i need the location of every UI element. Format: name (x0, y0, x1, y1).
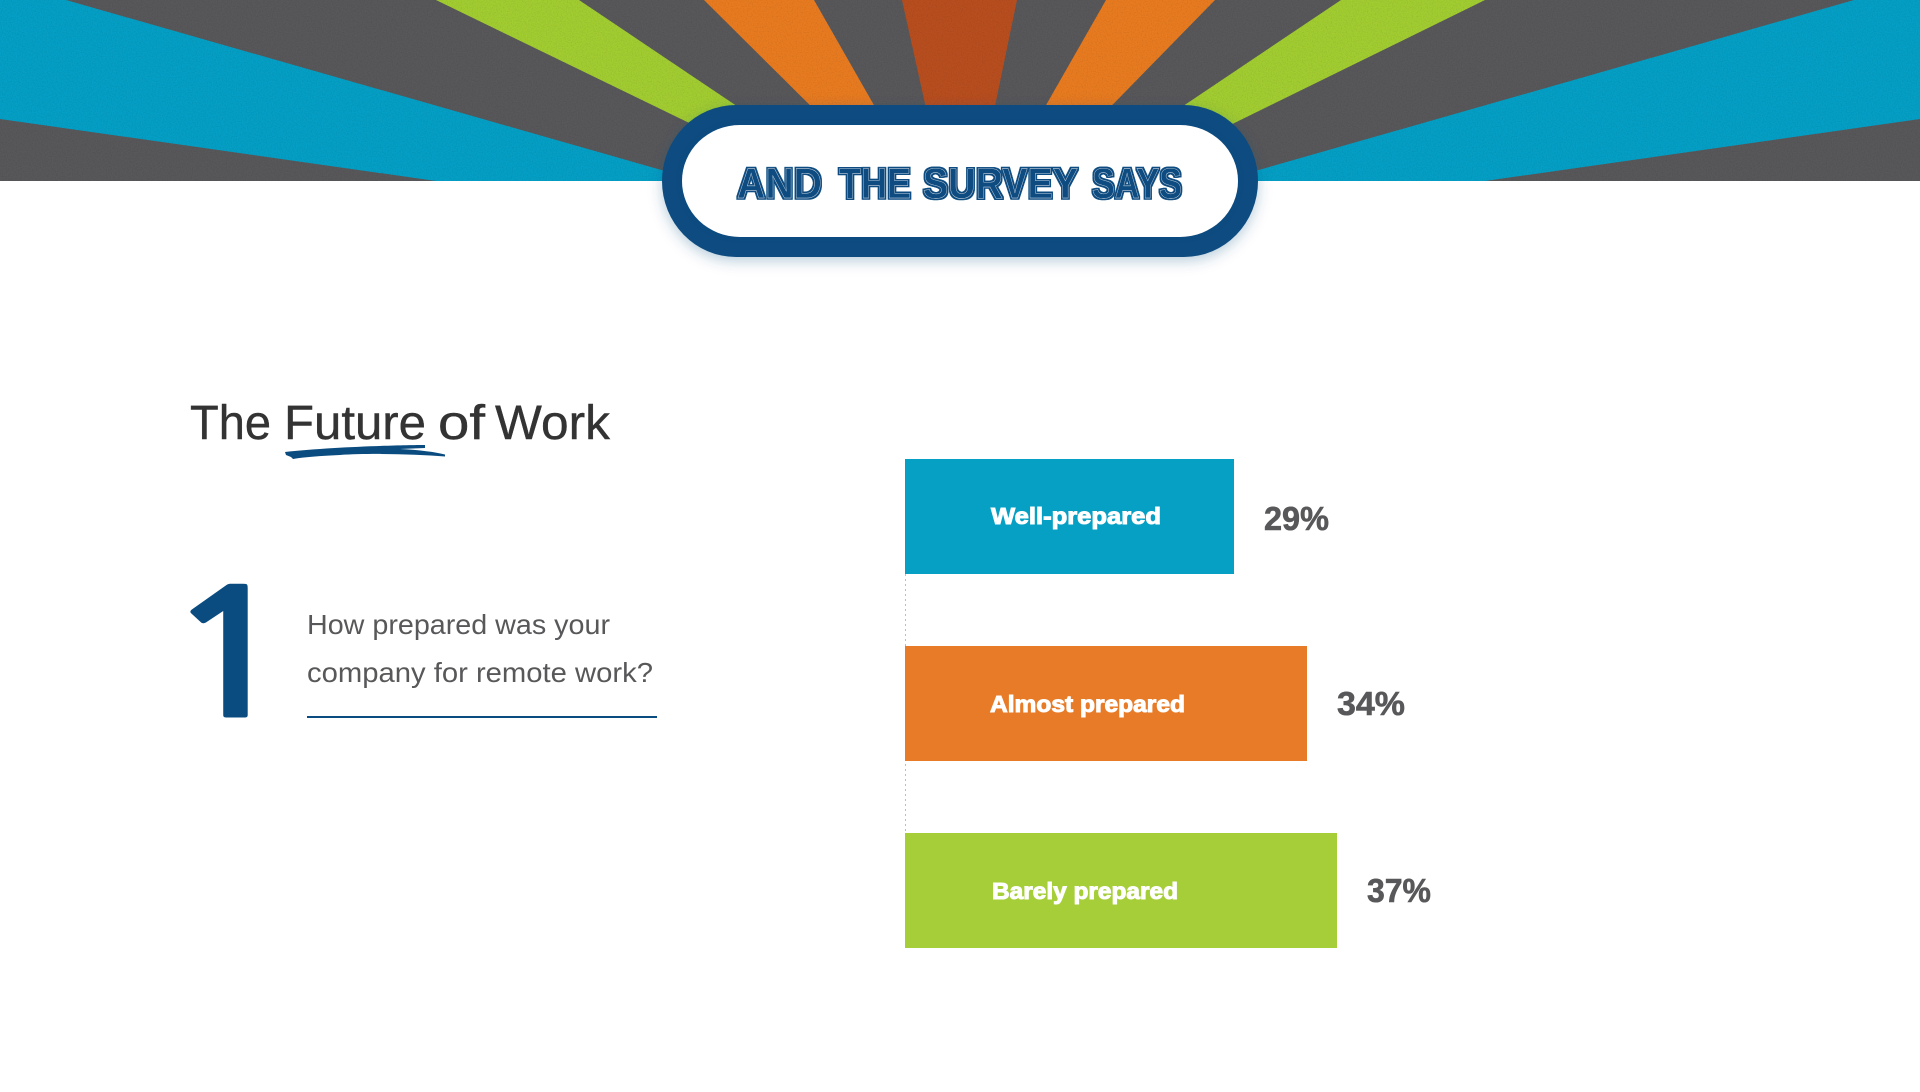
bar: Barely prepared 37%: 37% (1367, 872, 1431, 909)
heading: The Future of Work: Future (284, 397, 426, 450)
heading: The Future of Work: Work (495, 397, 611, 450)
title pill: And the survey says: THE (839, 160, 911, 208)
heading: The Future of Work (190, 397, 611, 459)
bar: Well-prepared 29%: 29% (1264, 500, 1329, 537)
bar: Almost prepared 34%: Almost prepared (990, 691, 1185, 717)
bar: Almost prepared 34% (905, 646, 1405, 761)
title pill: And the survey says (662, 105, 1258, 257)
heading: The Future of Work: of (438, 397, 486, 450)
title pill: And the survey says: SURVEY (923, 160, 1078, 208)
bar: Barely prepared 37%: Barely prepared (992, 878, 1178, 904)
bar: Barely prepared 37% (905, 833, 1431, 948)
question number 1: 1 (161, 570, 300, 744)
bar: Almost prepared 34%: 34% (1337, 685, 1405, 722)
title pill: And the survey says: SAYS (1092, 160, 1182, 208)
heading: The Future of Work: The (190, 397, 271, 450)
question text (307, 609, 657, 718)
header sunburst banner (0, 0, 1920, 181)
question text: How prepared was your (307, 609, 610, 640)
title pill: And the survey says: AND (737, 160, 822, 208)
question text: company for remote work? (307, 657, 653, 688)
bar: Well-prepared 29% (905, 459, 1329, 574)
bar: Well-prepared 29%: Well-prepared (991, 503, 1161, 529)
bar chart (905, 459, 1431, 948)
